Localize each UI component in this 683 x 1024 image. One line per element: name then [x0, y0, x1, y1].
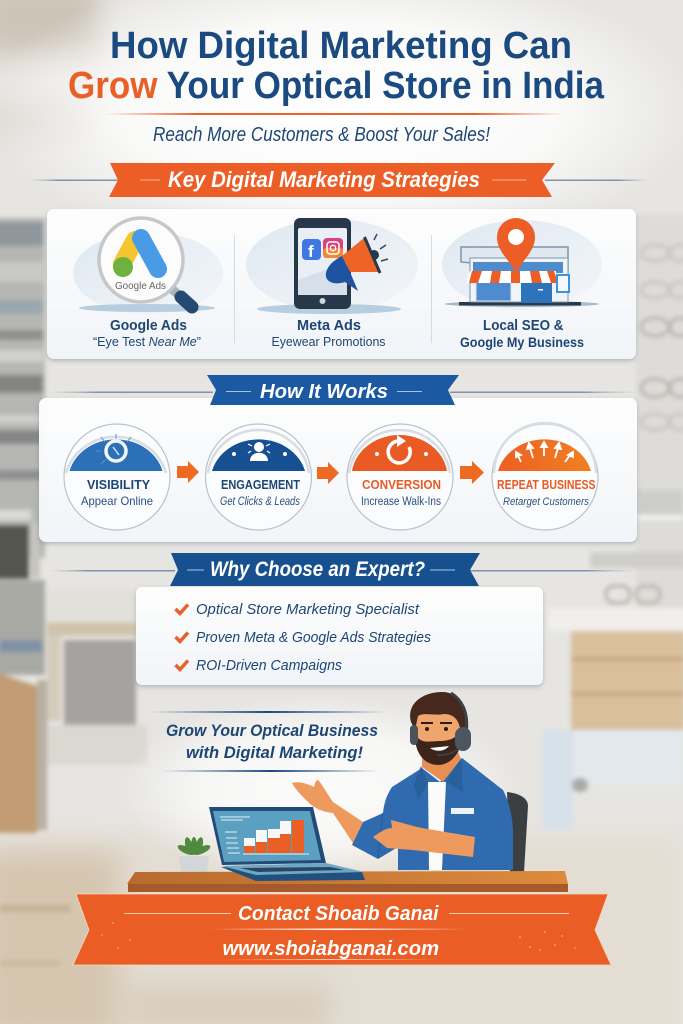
step: conversion: Increase Walk-Ins [361, 496, 441, 508]
shirt [352, 758, 513, 870]
tagline: with Digital Marketing! [186, 744, 363, 762]
face [414, 701, 462, 757]
collar and pocket tab [378, 758, 474, 858]
lower arm and hand [373, 820, 475, 857]
step: visibility: Appear Online [81, 494, 153, 508]
title [68, 25, 605, 107]
icon: meta ads phone and megaphone [246, 218, 418, 314]
label: meta ads: Meta Ads [297, 317, 361, 334]
banner: why choose an expert: Why Choose an Expert? [210, 558, 425, 581]
banner: contact [73, 894, 611, 965]
label: local seo [460, 317, 584, 350]
label: meta ads [272, 317, 386, 349]
panel: why choose an expert list [136, 587, 543, 685]
title underline [105, 113, 565, 115]
banner: contact: Contact Shoaib Ganai [238, 903, 439, 925]
hair [410, 692, 468, 730]
icon: local store with map pin [442, 218, 602, 310]
panel: how it works [39, 375, 638, 542]
list item 2: Proven Meta & Google Ads Strategies [196, 629, 431, 646]
label: meta ads: Eyewear Promotions [272, 334, 386, 349]
laptop [209, 807, 365, 881]
step: engagement: Get Clicks & Leads [220, 496, 300, 508]
tagline [150, 711, 387, 772]
arrow 1 [177, 461, 199, 483]
t-shirt [428, 782, 446, 870]
subtitle: Reach More Customers & Boost Your Sales! [153, 124, 490, 146]
banner: key digital marketing strategies: Key Digital Marketing Strategies [168, 167, 480, 192]
banner: key digital marketing strategies [30, 163, 650, 197]
icon: google ads magnifier: Google Ads [115, 280, 166, 292]
label: google ads: Google Ads [110, 317, 187, 334]
panel: strategies [47, 209, 636, 359]
headset [410, 693, 471, 755]
bar chart on screen [244, 820, 304, 853]
step: repeat business: Retarget Customers [503, 496, 589, 508]
banner: how it works [48, 375, 638, 405]
step: visibility: VISIBILITY [87, 478, 151, 492]
neck [422, 752, 461, 782]
title: How Digital Marketing Can [110, 25, 572, 67]
banner: contact: www.shoiabganai.com [222, 938, 439, 960]
step: visibility [64, 424, 170, 530]
label: local seo: Google My Business [460, 334, 584, 350]
tagline: Grow Your Optical Business [166, 722, 378, 740]
step: engagement [206, 424, 312, 530]
icon: meta ads phone and megaphone: f [308, 242, 314, 261]
chair [507, 792, 528, 872]
illustration: presenter at desk [127, 692, 568, 892]
arrow 3 [460, 461, 484, 484]
label: google ads [93, 317, 201, 349]
title: Grow Your Optical Store in India [68, 65, 605, 107]
beard [415, 730, 462, 765]
step: conversion [347, 424, 453, 530]
icon: google ads magnifier [73, 218, 223, 314]
list item 3: ROI-Driven Campaigns [196, 657, 342, 674]
step: conversion: CONVERSION [362, 478, 441, 492]
list item 1: Optical Store Marketing Specialist [196, 601, 420, 618]
label: google ads: “Eye Test Near Me” [93, 334, 201, 349]
step: engagement: ENGAGEMENT [221, 478, 300, 492]
label: local seo: Local SEO & [483, 317, 564, 334]
banner: why choose an expert [50, 553, 635, 586]
raised arm and hand [292, 780, 363, 843]
step: repeat business: REPEAT BUSINESS [497, 478, 596, 492]
plant [176, 836, 212, 875]
desk [127, 871, 568, 892]
arrow 2 [317, 462, 339, 484]
banner: how it works: How It Works [260, 381, 388, 403]
eyes [421, 722, 452, 731]
step: repeat business [492, 423, 598, 530]
